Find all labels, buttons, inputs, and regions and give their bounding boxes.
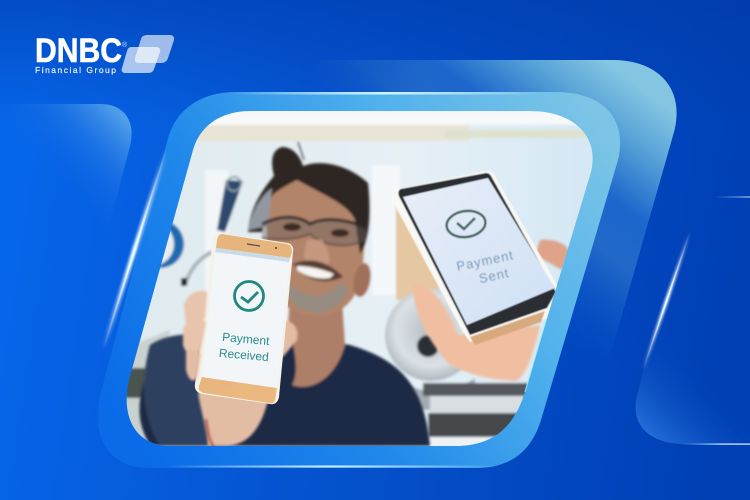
logo: DNBC Financial Group — [35, 32, 174, 75]
logo wordmark: DNBC — [35, 32, 122, 70]
logo mark: overlapping cards — [122, 35, 174, 73]
decorative right panel — [636, 196, 750, 445]
right hand — [412, 240, 570, 381]
room background — [120, 105, 600, 450]
photo edge highlight — [525, 320, 546, 392]
left hand — [198, 320, 298, 448]
man — [139, 142, 430, 446]
outer frame — [98, 92, 620, 468]
back translucent panel — [343, 60, 677, 336]
logo tagline: Financial Group — [35, 65, 116, 75]
photo: man holding phones — [120, 105, 600, 450]
phone left: payment received: Received — [218, 346, 269, 364]
phone left: payment received — [195, 233, 293, 404]
phone right: payment sent: Sent — [477, 265, 511, 286]
phone right: payment sent: Payment — [455, 247, 515, 274]
decorative left panel — [0, 104, 132, 262]
fingers over left phone — [183, 291, 207, 380]
phone left: payment received: Payment — [222, 330, 271, 348]
registered mark: ® — [122, 41, 128, 49]
phone right: payment sent — [391, 171, 560, 345]
